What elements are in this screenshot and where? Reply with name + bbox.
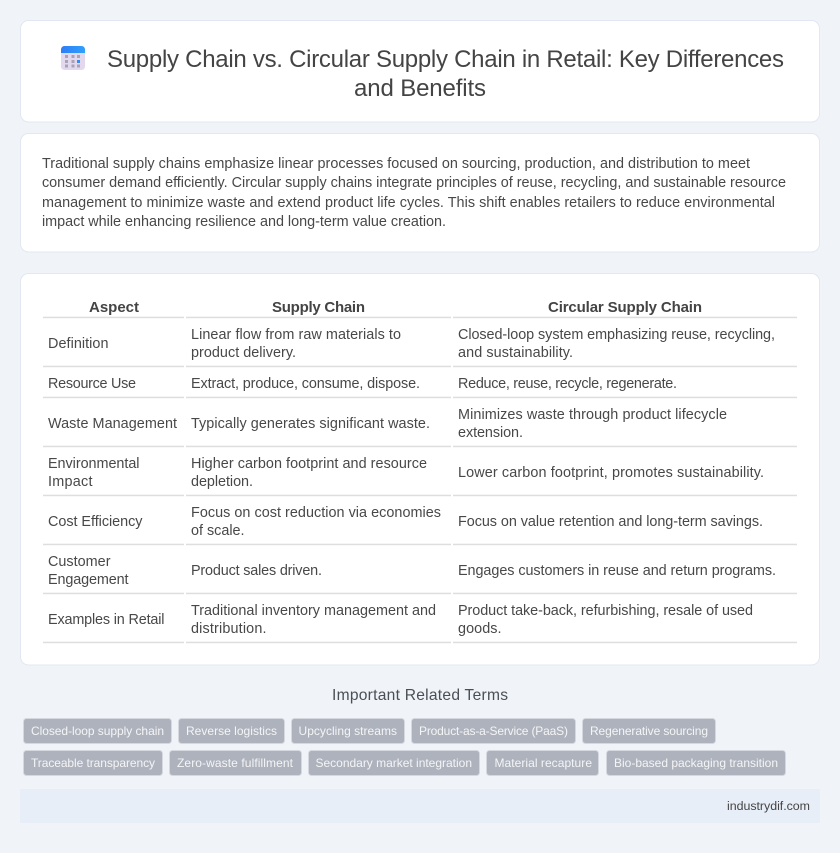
row: resource use: Reduce, reuse, recycle, regenerate. (458, 376, 677, 392)
tag: zero-waste fulfillment (170, 750, 302, 776)
row: examples in retail: Traditional inventory management and (191, 603, 436, 619)
tag: closed-loop supply chain: Closed-loop supply chain (31, 724, 164, 738)
row: definition: and sustainability. (458, 345, 573, 361)
row: examples in retail: Examples in Retail (48, 612, 164, 628)
row: customer engagement: Engages customers in reuse and return programs. (458, 563, 776, 579)
title: and Benefits (354, 75, 486, 102)
tag: reverse logistics (178, 718, 284, 744)
panel: comparison table (20, 274, 820, 665)
tag: zero-waste fulfillment: Zero-waste fulfillment (177, 756, 294, 770)
row: environmental impact: Higher carbon footprint and resource (191, 456, 427, 472)
tag: upcycling streams: Upcycling streams (298, 724, 397, 738)
row: customer engagement: Product sales driven. (191, 563, 322, 579)
tag: material recapture: Material recapture (494, 756, 592, 770)
table header row: Aspect (89, 299, 139, 316)
tag: bio-based packaging transition (606, 750, 786, 776)
tag: bio-based packaging transition: Bio-based packaging transition (614, 756, 778, 770)
row: cost efficiency: Focus on value retention and long-term savings. (458, 514, 763, 530)
text block: introduction paragraph (42, 156, 786, 230)
text block: introduction paragraph: impact while enhancing resilience and long-term value creation. (42, 214, 446, 230)
tag: upcycling streams (292, 718, 404, 744)
row: environmental impact: Lower carbon footprint, promotes sustainability. (458, 465, 764, 481)
row: environmental impact (48, 456, 764, 490)
row: waste management: Waste Management (48, 416, 177, 432)
row: waste management (48, 407, 727, 441)
row: definition: Linear flow from raw materials to (191, 327, 401, 343)
tag: traceable transparency (24, 750, 162, 776)
row: examples in retail: distribution. (191, 621, 266, 637)
tag: secondary market integration (308, 750, 480, 776)
row: resource use (48, 376, 677, 392)
row: definition: Closed-loop system emphasizing reuse, recycling, (458, 327, 775, 343)
tag: product-as-a-service (412, 718, 576, 744)
row: definition: product delivery. (191, 345, 296, 361)
row: customer engagement (48, 554, 776, 588)
text block: introduction paragraph: consumer demand efficiently. Circular supply chains integrate principles of reuse, recycling, and sustainable resource (42, 175, 786, 191)
row: definition: Definition (48, 336, 108, 352)
tag: product-as-a-service: Product-as-a-Service (PaaS) (419, 724, 568, 738)
row: definition (48, 327, 775, 361)
title: Supply Chain vs. Circular Supply Chain in Retail: Key Differences (107, 46, 784, 73)
row: waste management: Minimizes waste through product lifecycle (458, 407, 727, 423)
panel: introduction (20, 134, 820, 252)
icon: calendar (61, 46, 85, 70)
tag: secondary market integration: Secondary market integration (316, 756, 472, 770)
row: cost efficiency: of scale. (191, 523, 244, 539)
row: customer engagement: Engagement (48, 572, 128, 588)
row: cost efficiency: Cost Efficiency (48, 514, 143, 530)
footer (20, 789, 820, 823)
row: waste management: Typically generates significant waste. (191, 416, 430, 432)
row: examples in retail: Product take-back, refurbishing, resale of used (458, 603, 753, 619)
row: cost efficiency (48, 505, 763, 539)
tag: reverse logistics: Reverse logistics (186, 724, 277, 738)
row: environmental impact: Environmental (48, 456, 140, 472)
row: examples in retail (48, 603, 753, 637)
title (107, 46, 784, 102)
tag: regenerative sourcing (582, 718, 716, 744)
text block: introduction paragraph: management to minimize waste and extend product life cycles. This shift enables retailers to reduce environmental (42, 195, 775, 211)
row: environmental impact: depletion. (191, 474, 253, 490)
tag: traceable transparency: Traceable transparency (31, 756, 155, 770)
row: customer engagement: Customer (48, 554, 111, 570)
row: examples in retail: goods. (458, 621, 502, 637)
tag: regenerative sourcing: Regenerative sourcing (590, 724, 708, 738)
footer: industrydif.com (727, 799, 810, 813)
tag: closed-loop supply chain (24, 718, 172, 744)
related term tags (24, 718, 786, 776)
row: waste management: extension. (458, 425, 523, 441)
tag: material recapture (486, 750, 598, 776)
panel: page header (20, 20, 820, 122)
text block: introduction paragraph: Traditional supply chains emphasize linear processes focused on sourcing, production, and distribution to meet (42, 156, 750, 172)
heading: important related terms: Important Related Terms (332, 687, 508, 704)
row: environmental impact: Impact (48, 474, 92, 490)
row: resource use: Resource Use (48, 376, 136, 392)
table header row (89, 299, 702, 316)
row: resource use: Extract, produce, consume, dispose. (191, 376, 420, 392)
table header row: Circular Supply Chain (548, 299, 702, 316)
row: cost efficiency: Focus on cost reduction via economies (191, 505, 441, 521)
table header row: Supply Chain (272, 299, 365, 316)
